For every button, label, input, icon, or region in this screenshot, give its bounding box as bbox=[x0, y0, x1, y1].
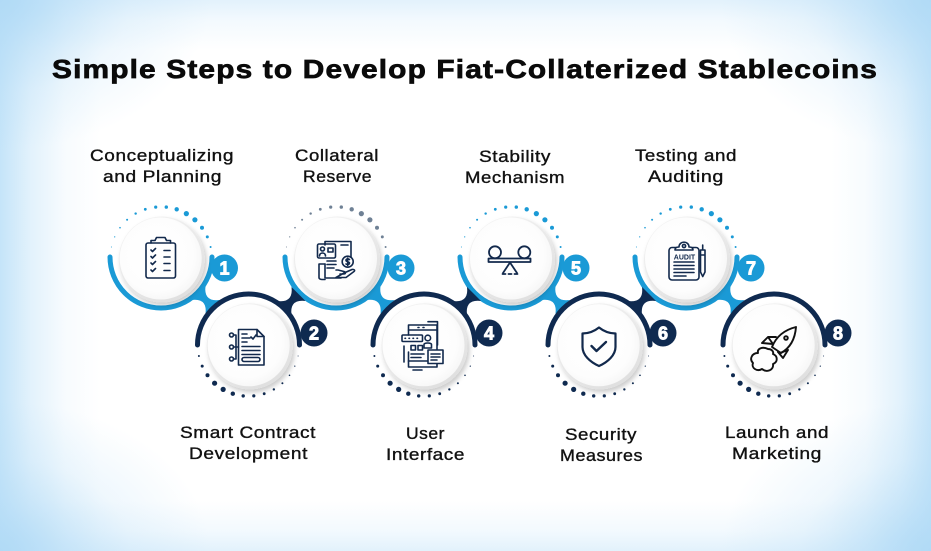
icon: clipboard checklist bbox=[146, 238, 176, 278]
icon: stability balance bbox=[488, 246, 530, 274]
label: step 8: Marketing bbox=[732, 445, 822, 463]
badge 6: 6 bbox=[658, 324, 668, 344]
badge 6 bbox=[650, 320, 676, 346]
badge 4: 4 bbox=[484, 324, 494, 344]
label: step 3: Collateral bbox=[295, 147, 379, 165]
badge 3 bbox=[388, 254, 414, 282]
icon: collateral reserve paper and coin bbox=[318, 242, 355, 280]
badge 7: 7 bbox=[746, 258, 756, 278]
label: step 6: Measures bbox=[560, 447, 643, 465]
label: step 6 bbox=[560, 426, 643, 465]
top labels bbox=[90, 147, 737, 187]
dark arcs and connectors bbox=[198, 287, 825, 345]
label: step 7: Testing and bbox=[635, 147, 737, 165]
label: step 4: User bbox=[406, 425, 445, 443]
icon: user interface screens bbox=[402, 322, 443, 370]
label: step 7 bbox=[635, 147, 737, 186]
blue arcs and connectors bbox=[110, 257, 744, 314]
label: step 2 bbox=[180, 424, 316, 463]
label: step 1: Conceptualizing bbox=[90, 147, 234, 165]
icon: launch rocket bbox=[751, 327, 796, 371]
label: step 4 bbox=[386, 425, 465, 464]
white discs bbox=[119, 216, 818, 389]
badge 2: 2 bbox=[309, 324, 319, 344]
label: step 3: Reserve bbox=[303, 168, 372, 186]
icon: security shield bbox=[582, 328, 616, 366]
number badges bbox=[211, 254, 852, 346]
icon: smart contract document bbox=[230, 330, 264, 365]
bottom labels bbox=[180, 424, 829, 465]
label: step 8 bbox=[725, 424, 829, 463]
label: step 1 bbox=[90, 147, 234, 186]
label: step 2: Smart Contract bbox=[180, 424, 316, 442]
label: step 8: Launch and bbox=[725, 424, 829, 442]
badge 1: 1 bbox=[219, 258, 230, 278]
label: step 5 bbox=[465, 148, 565, 187]
badge 2 bbox=[300, 320, 328, 346]
badge 7 bbox=[738, 254, 764, 282]
label: step 2: Development bbox=[189, 445, 308, 463]
badge 5 bbox=[562, 254, 590, 282]
label: step 5: Mechanism bbox=[465, 169, 565, 187]
icon: audit clipboard bbox=[669, 242, 705, 280]
label: step 3 bbox=[295, 147, 379, 186]
label: step 1: and Planning bbox=[103, 168, 222, 186]
badge 8 bbox=[824, 320, 852, 346]
label: step 4: Interface bbox=[386, 446, 465, 464]
badge 8: 8 bbox=[833, 324, 843, 344]
badge 4 bbox=[476, 320, 502, 346]
badge 5: 5 bbox=[571, 258, 581, 278]
badge 1 bbox=[211, 254, 238, 282]
icon: audit clipboard: AUDIT bbox=[674, 254, 696, 262]
label: step 7: Auditing bbox=[648, 168, 724, 186]
badge 3: 3 bbox=[396, 258, 406, 278]
label: step 5: Stability bbox=[479, 148, 551, 166]
label: step 6: Security bbox=[565, 426, 637, 444]
dotted arcs bbox=[111, 205, 824, 398]
title: Simple Steps to Develop Fiat-Collaterized Stablecoins bbox=[52, 54, 878, 84]
